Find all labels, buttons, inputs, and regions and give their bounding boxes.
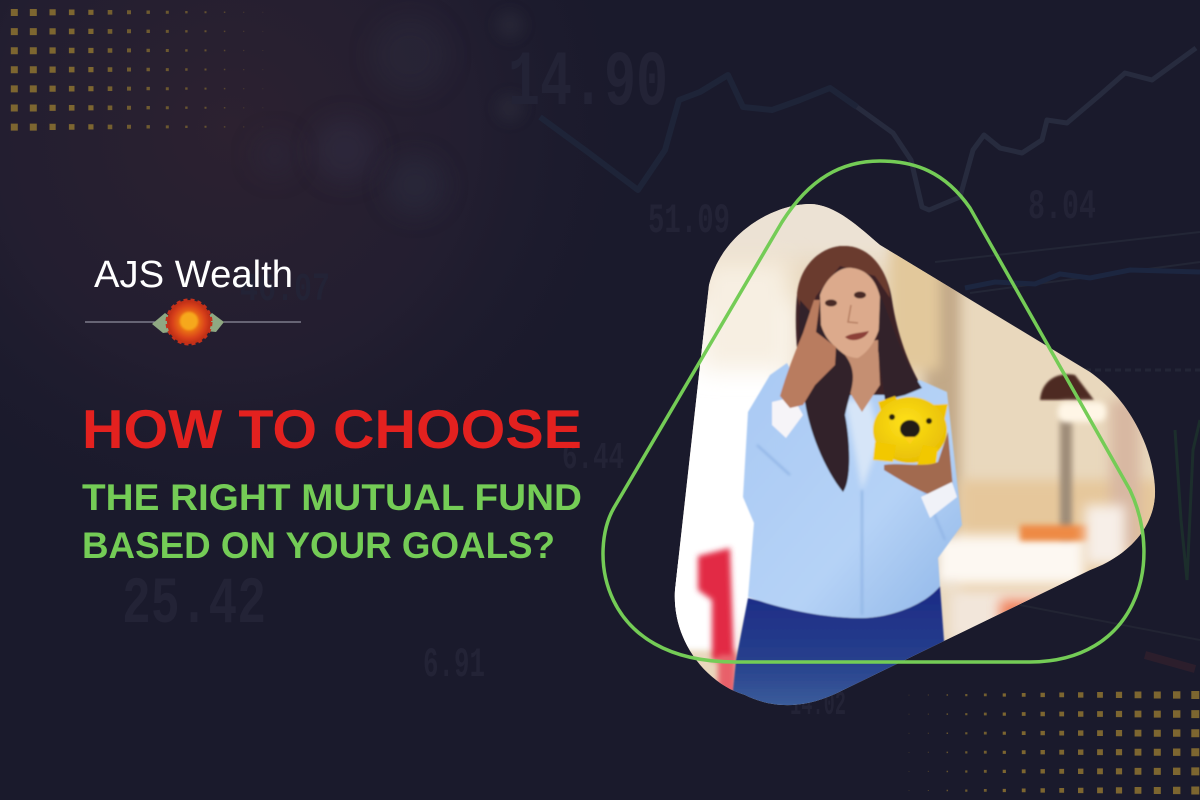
ghost market numbers: 25.42 [122, 567, 266, 642]
hand holding piggy [884, 432, 953, 498]
dot grid: top left [14, 9, 263, 135]
jeans [730, 586, 960, 720]
forearm and hand [780, 300, 836, 408]
logo: AJS Wealth [85, 254, 301, 344]
subtitle line 2: BASED ON YOUR GOALS? [82, 525, 555, 566]
line chart [540, 48, 1196, 210]
ghost market numbers: 6.44 [562, 437, 624, 480]
ghost market numbers [122, 40, 1096, 725]
photo background [674, 204, 1156, 706]
logo divider [85, 321, 301, 323]
hair back [794, 246, 919, 396]
photo: woman with piggy bank [674, 204, 1156, 706]
title: how to choose: HOW TO CHOOSE [82, 398, 582, 460]
green triangle outline [603, 161, 1144, 662]
ghost market numbers: 14.90 [508, 40, 668, 128]
hair right strand [878, 295, 922, 400]
subtitle line 1: THE RIGHT MUTUAL FUND [82, 477, 582, 518]
subtitle [82, 477, 582, 566]
ghost market numbers: 6.91 [423, 641, 485, 689]
hair long left strand [799, 300, 853, 492]
logo leaves [152, 313, 224, 333]
neck [840, 340, 880, 412]
ghost market numbers: 14.02 [790, 687, 846, 725]
piggy bank [873, 396, 948, 472]
shirt [743, 363, 962, 618]
dot grid: bottom right [909, 691, 1195, 800]
eyes and lips [825, 292, 869, 340]
ghost market numbers: 46.07 [240, 268, 330, 313]
logo marigold [167, 300, 211, 344]
ghost market numbers: 8.04 [1028, 183, 1096, 231]
sleeve cuff [772, 397, 803, 438]
ghost market numbers: 51.09 [648, 197, 730, 245]
logo wordmark: AJS Wealth [94, 254, 293, 296]
face [820, 268, 882, 358]
